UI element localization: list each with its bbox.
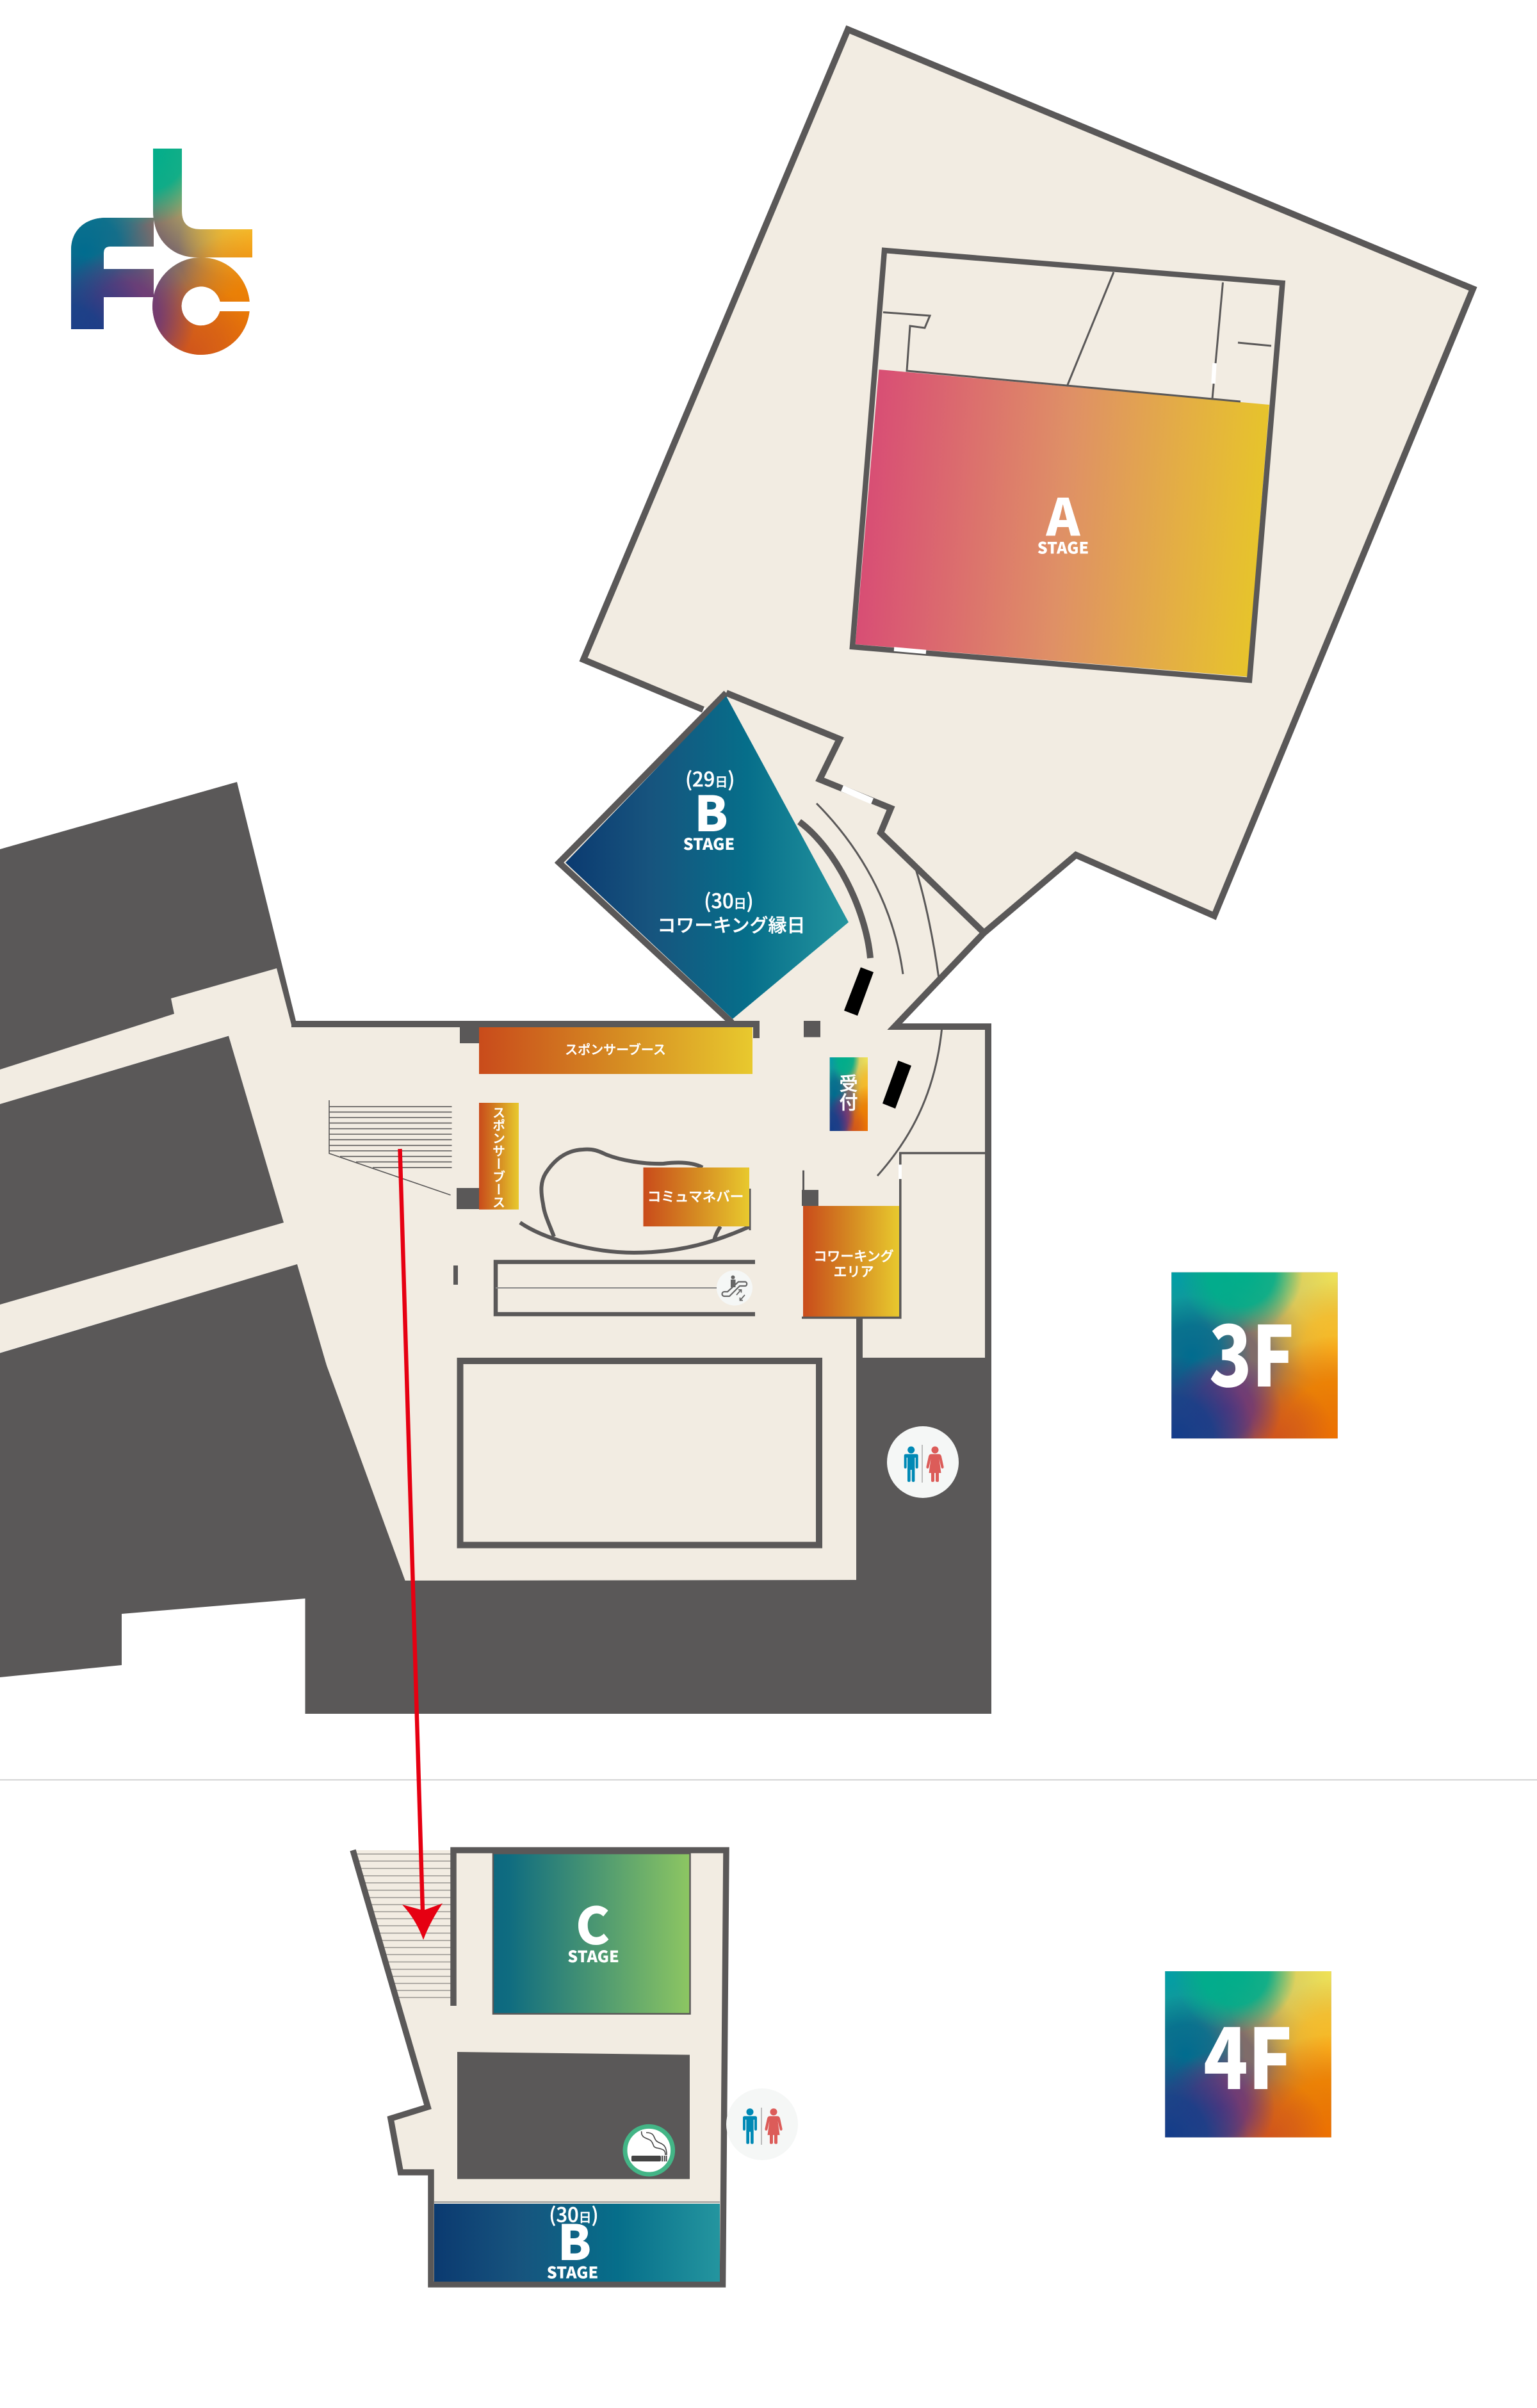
door gap (899, 1164, 902, 1179)
dark area bottom (0, 1264, 991, 1714)
floor badge 3F (1171, 1273, 1338, 1438)
C letter: C (576, 1885, 610, 1960)
stage B fill (565, 696, 849, 1019)
arrow: stairs 3F to 4F (400, 1149, 443, 1940)
bar label: コミュマネバー (647, 1186, 744, 1206)
thin curve 3 (877, 1029, 942, 1176)
columns (453, 1021, 820, 1285)
diamond walls (559, 693, 732, 1023)
label A: A (1046, 476, 1081, 551)
sponsor booth vertical (479, 1103, 519, 1210)
outer walls of hall A (583, 29, 1473, 1359)
bar blob (541, 1150, 703, 1237)
escalator centre line (496, 1287, 717, 1289)
thin curve 1 (817, 803, 903, 974)
thin curve 2 (916, 868, 939, 979)
area label line 1: コワーキング (813, 1246, 894, 1265)
entrance gate black 2 (882, 1061, 911, 1109)
icon: toilet 4F (726, 2088, 798, 2160)
booth fill (479, 1027, 752, 1074)
divider between floors (0, 1779, 1537, 1780)
stairs 3F (329, 1100, 452, 1195)
stage label: STAGE (567, 1944, 619, 1967)
floor area 4F (353, 1850, 726, 2284)
corridor walls (726, 693, 985, 934)
B letter: B (558, 2204, 591, 2274)
escalator walls (496, 1262, 755, 1314)
stair outline (329, 1100, 451, 1195)
29th label: (29日) (685, 763, 735, 792)
stairs 4F (356, 1854, 451, 1997)
dark service block (457, 2052, 690, 2179)
escalator (496, 1262, 755, 1314)
door gaps (894, 363, 1214, 652)
room A inner partitions (883, 272, 1271, 402)
curved walls near entrance (799, 803, 942, 1176)
bar arc (520, 1223, 750, 1253)
stage A background (856, 370, 1269, 677)
stage label: STAGE (547, 2261, 598, 2284)
top wall lower hall (291, 1021, 760, 1027)
bar side line (749, 1189, 751, 1230)
reception (830, 1057, 868, 1131)
floor area 3F (0, 29, 1473, 1581)
panel: 3F floor plan (0, 29, 1473, 1714)
vertical wall to toilet block (856, 1317, 863, 1360)
curved bar walls (520, 1150, 750, 1253)
community manager bar (643, 1167, 749, 1226)
bar short wall (714, 1226, 720, 1241)
stage B fill (434, 2204, 720, 2282)
icon: smoking area (625, 2126, 673, 2174)
bar fill (643, 1167, 749, 1226)
area label line 2: エリア (834, 1262, 874, 1281)
area walls (802, 1153, 985, 1318)
stage label: STAGE (683, 832, 735, 855)
label stage: STAGE (1037, 535, 1089, 558)
wall stub (802, 1171, 804, 1190)
coworking fair label: コワーキング縁日 (657, 911, 806, 938)
coworking area (802, 1153, 985, 1318)
30th label: (30日) (549, 2199, 599, 2228)
booth label: スポンサーブース (565, 1039, 666, 1058)
logo (71, 149, 252, 355)
dark area middle left (0, 1036, 284, 1305)
reception label: 受付 (835, 1074, 862, 1111)
thick curve (799, 822, 870, 958)
stage C (493, 1853, 690, 2013)
large enclosed room (460, 1361, 819, 1545)
booth label: スポンサーブース (489, 1106, 508, 1208)
walls 4F (353, 1850, 726, 2284)
booth fill (479, 1103, 519, 1210)
door gap (842, 788, 872, 801)
sponsor booth horizontal (479, 1027, 752, 1074)
B letter: B (694, 775, 728, 845)
room A walls (852, 250, 1282, 680)
icon: toilet 3F (887, 1426, 959, 1498)
dark area top left (0, 782, 296, 1070)
icon: escalator (717, 1271, 752, 1305)
30th label: (30日) (704, 885, 754, 914)
floor badge 4F: 4F (1203, 1993, 1292, 2113)
floor badge 3F: 3F (1209, 1290, 1294, 1411)
entrance gate black 1 (844, 967, 874, 1016)
reception gradient (830, 1057, 868, 1131)
stage C fill (493, 1853, 690, 2013)
stage B 4F (434, 2199, 720, 2284)
panel: 4F floor plan (353, 1850, 798, 2284)
area fill (803, 1206, 899, 1317)
room A (852, 250, 1282, 680)
stair treads (329, 1107, 452, 1167)
floor badge 4F (1165, 1971, 1331, 2137)
stage B diamond (565, 696, 849, 1019)
